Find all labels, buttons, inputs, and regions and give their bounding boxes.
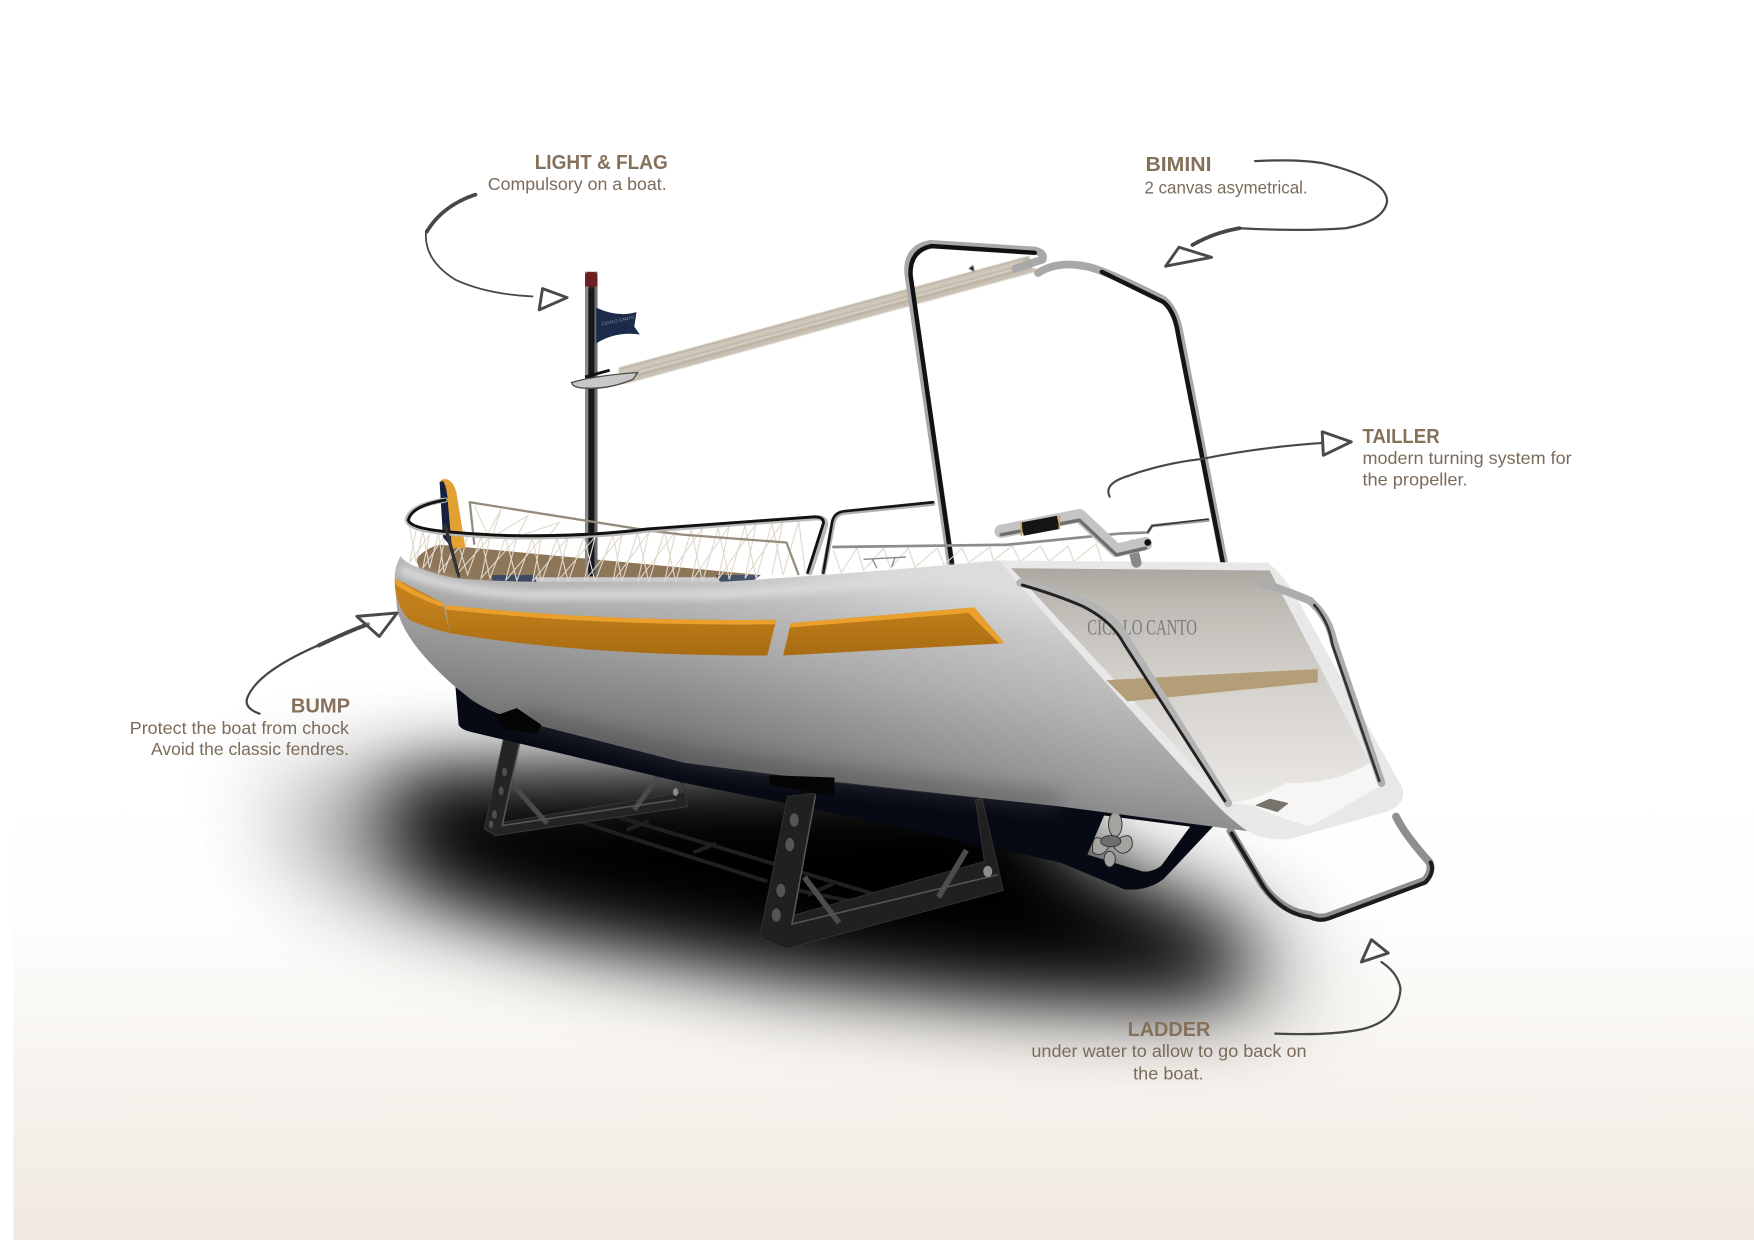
bimini clamp [572,370,638,388]
rope rail [470,502,799,575]
stern grab rail right [1262,583,1381,783]
front railing [407,500,933,576]
callout: light & flag [426,152,668,310]
aft seat frame [864,557,906,568]
arrow: to flag [426,195,567,310]
background fade [13,772,1754,1240]
callout: bimini [1144,154,1387,266]
text: ladder description: under water to allow to go back on [1031,1041,1307,1061]
callout: ladder [1031,940,1401,1083]
navy keel and skeg [455,685,1217,890]
seat well [515,577,727,587]
orange bumpers [395,578,1005,656]
transom [999,560,1403,839]
deck [416,545,761,586]
arrow: to bimini [1166,160,1387,266]
heading: bimini: BIMINI [1145,154,1211,176]
heading: ladder: LADDER [1128,1019,1211,1041]
bimini arch right [1038,264,1224,562]
text: tailler description: modern turning system for [1362,448,1572,468]
flag: CICALO CANTO [601,315,635,327]
arrow: to bump [247,613,397,714]
cradle clamp blocks [494,708,834,796]
transom name: CICALO CANTO [1087,614,1197,639]
heading: bump: BUMP [291,696,350,718]
swim hatch [1255,799,1289,812]
rear cradle stand [760,793,1003,949]
flag mast [585,272,597,576]
ground shadow [263,772,1309,996]
boat [395,244,1432,949]
ladder [1230,817,1432,920]
text: bump description: Protect the boat from chock [130,718,349,738]
tiller [1001,516,1208,563]
cradle rails [582,817,895,908]
text: bump description: Avoid the classic fendres. [151,739,349,759]
heading: tailler: TAILLER [1362,426,1440,448]
arrow: to tiller [1108,432,1351,497]
railing netting [409,506,1102,582]
far side rail [832,532,1148,547]
text: light & flag description: Compulsory on a boat. [488,174,667,194]
transom bench [1106,669,1318,701]
hull [395,556,1247,831]
propeller [1093,812,1132,867]
bimini arch left [908,244,1043,564]
callout: tailler [1108,426,1572,497]
flag [596,308,640,343]
stern grab rail left [1020,583,1228,803]
front cradle stand [484,733,688,836]
bimini canvas [619,262,1036,381]
bow backrest [440,479,465,548]
heading: light & flag: LIGHT & FLAG [535,152,668,174]
arrow: to ladder [1275,940,1401,1034]
text: tailler description: the propeller. [1362,469,1468,489]
text: bimini description: 2 canvas asymetrical. [1144,178,1308,198]
callout: bump [130,613,397,759]
text: ladder description: the boat. [1133,1063,1204,1083]
